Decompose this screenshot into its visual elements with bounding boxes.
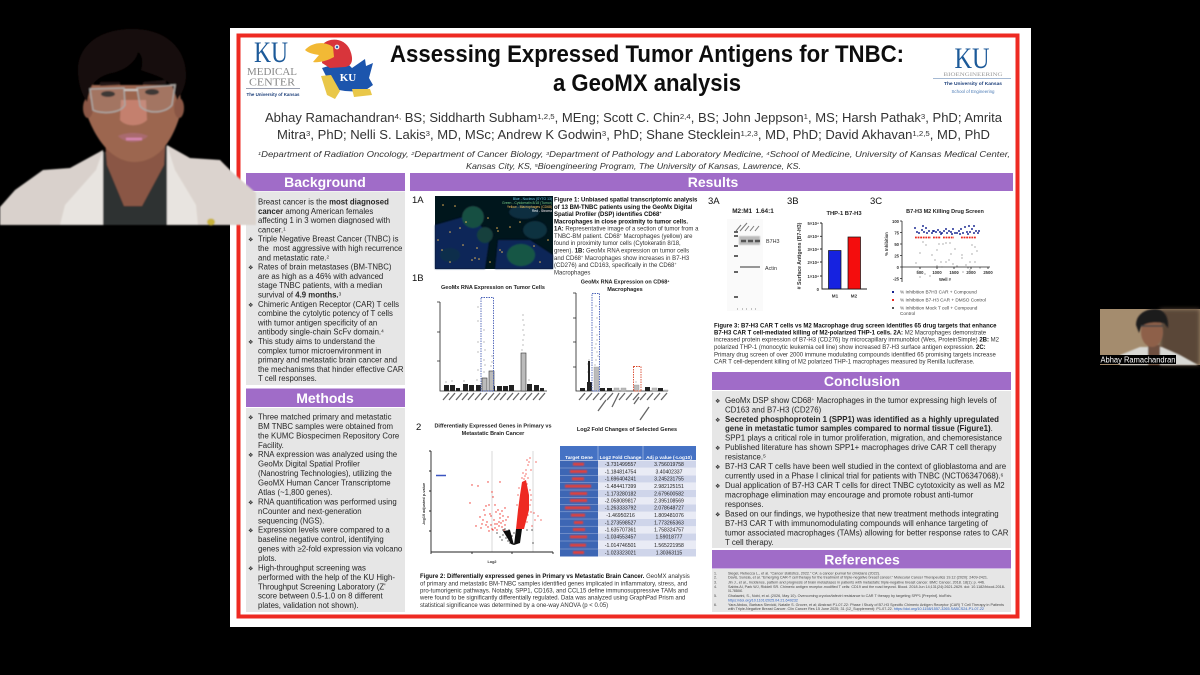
caption: figure 2 [419, 574, 690, 609]
text: conclusion bullets: ❖ [715, 464, 720, 471]
logo: KU Medical Center: The University of Kansas [246, 92, 300, 97]
text: conclusion bullets: ❖ [715, 483, 720, 490]
caption: figure 2: of primary and metastatic BM-TNBC samples identified genes implicated in inflammatory, stress, and [420, 581, 687, 587]
text: reference list: Yara Abdou, Barbara Sievicki, Natalie S. Grover, et al; Abstract P1-07-22: Phase I Study of B7-H3 Specific Chimeric Antigen Receptor (CAR) T Cell Therapy in Patients [728, 603, 1004, 607]
text: methods bullets: nCounter and next-generation [258, 507, 362, 516]
logo: KU Medical Center: KU [254, 36, 288, 69]
text: reference list: Jin J., et al., Incidence, pattern and prognosis of brain metastases in patients with metastatic triple-negative breast cancer. BMC Cancer, 2018. 18(1): p. 446. [728, 580, 985, 584]
panel: methods [246, 388, 405, 612]
affiliations [258, 149, 1010, 171]
logo: KU Medical Center: MEDICAL [247, 66, 297, 78]
heading: references: References [824, 552, 900, 568]
text: methods bullets: the KUMC Biospecimen Repository Core [258, 431, 399, 440]
text: conclusion bullets: T cell therapy. [725, 538, 774, 547]
text: methods bullets: ❖ [248, 528, 253, 535]
text: methods bullets: Atlas (~1,800 genes). [258, 488, 332, 497]
text: background bullets: ❖ [248, 339, 253, 346]
figure label 1B: 1B [412, 273, 424, 284]
caption: figure 1: Figure 1: Unbiased spatial transcriptomic analysis [554, 198, 698, 204]
table: log2 fold changes: 2.982125151 [654, 484, 684, 490]
text: reference list: https://doi.org/10.1101/2025.04.21.649232 [728, 598, 798, 602]
text: reference list [714, 572, 1006, 611]
chart: immunoblot: B7H3 [766, 239, 780, 245]
text: background bullets: antibody single-chain ScFv domain.4 [258, 328, 384, 337]
legend: % Inhibition Mock T cell + Compound [900, 306, 978, 310]
chart: volcano plot: Log2 [487, 560, 497, 564]
caption: figure 1: Macrophages in close proximity to tumor cells. [554, 219, 688, 225]
caption: figure 3: Figure 3: B7-H3 CAR T cells vs M2 Macrophage drug screen identifies 65 drug targets that enhance [714, 323, 997, 329]
table: log2 fold changes: -1.184814754 [605, 469, 636, 475]
heading: conclusion: Conclusion [824, 373, 900, 389]
table: log2 fold changes: 2.679600582 [654, 491, 684, 497]
text: methods bullets: High-throughput screening was [258, 563, 366, 572]
text: reference list: 2. [714, 576, 717, 580]
chart: THP-1 B7-H3 bars: 0 [817, 287, 820, 292]
text: conclusion bullets: SPP1 plays a critical role in tumor proliferation, migration, and chemoresistance [725, 434, 1003, 443]
chart: THP-1 B7-H3 bars: M1 [832, 294, 839, 298]
text: reference list: Siegel, Rebecca L., et al. "Cancer statistics, 2022." CA: a cancer journal for clinicians (2022). [728, 572, 880, 576]
text: methods bullets: baseline negative control, identifying [258, 535, 384, 544]
panel: background [246, 173, 405, 385]
chart: volcano plot: Metastatic Brain Cancer [462, 431, 525, 437]
authors: Mitra3, PhD; Nelli S. Lakis 3, MD, MSc; Andrew K Godwin 3, PhD; Shane Stecklein 1,2,3, MD, PhD; David Akhavan 1,2,5, MD, PhD [277, 128, 990, 142]
text: conclusion bullets: resistance.5 [725, 453, 766, 462]
text: conclusion bullets [715, 396, 1009, 547]
table: log2 fold changes: 3.245231755 [654, 477, 684, 483]
text: conclusion bullets: gene in metastatic tumor samples compared to normal tissue (Figure1). [725, 424, 993, 433]
text: methods bullets: sequencing (NGS). [258, 516, 324, 525]
image: fluorescence micrograph: Blue - Nucleus (SYTO 13) [513, 197, 552, 201]
chart: THP-1 B7-H3 bars: 5×10⁴ [807, 221, 819, 226]
logo: KU Medical Center: CENTER [249, 76, 296, 88]
text: background bullets: Chimeric Antigen Receptor (CAR) T cells [258, 300, 399, 309]
chart: expression on tumor cells: GeoMx RNA Expression on Tumor Cells [441, 285, 545, 291]
text: conclusion bullets: ❖ [715, 445, 720, 452]
table: log2 fold changes: -1.023323021 [605, 550, 636, 556]
chart: THP-1 B7-H3 bars: 1×10⁴ [807, 274, 819, 279]
logo: KU Bioengineering: School of Engineering [952, 89, 995, 94]
legend [892, 290, 986, 316]
text: reference list: 5. [714, 594, 717, 598]
figure label 3C: 3C [870, 196, 882, 207]
presenter video: thumbnail [1100, 309, 1200, 365]
chart: volcano plot: -log10 adjusted p-value [422, 483, 426, 525]
text: methods bullets: plates, validation not shown). [258, 601, 359, 610]
caption: figure 2: Figure 2: Differentially expressed genes in Primary vs Metastatic Brain Cancer. GeoMX analysis [420, 574, 690, 580]
figure label 1A: 1A [412, 195, 424, 206]
caption: figure 3: polarized THP-1 (monocytic leukemia cell line) show increased B7-H3 surface antigen expression. 2C: [714, 345, 986, 351]
legend: % Inhibition B7-H3 CAR + DMSO Control [900, 298, 986, 302]
table: log2 fold changes: -2.058089817 [605, 498, 636, 504]
table: log2 fold changes: 3.40402337 [656, 469, 683, 475]
chart: THP-1 B7-H3 bars: 2×10⁴ [807, 260, 819, 265]
text: methods bullets: Throughput Screening Laboratory (Z' [258, 582, 386, 591]
text: reference list: 6. [714, 603, 717, 607]
title [390, 41, 904, 97]
table: log2 fold changes: 1.565221958 [654, 543, 684, 549]
chart: drug screen scatter: B7-H3 M2 Killing Drug Screen [906, 209, 984, 215]
text: background bullets: cancer among American females [258, 207, 373, 216]
chart: volcano plot [422, 424, 553, 564]
authors: Abhay Ramachandran 4, BS; Siddharth Subham 1,2,5, MEng; Scott C. Chin 2,4, BS; John Jeppson 1, MS; Harsh Pathak 3, PhD; Amrita [265, 111, 1002, 125]
caption: figure 1: green). 1B: GeoMx RNA expression on tumor cells [554, 248, 689, 254]
chart: drug screen scatter: 2500 [983, 270, 993, 275]
table: log2 fold changes: -1.696404241 [605, 477, 636, 483]
logo: KU Medical Center [246, 36, 300, 97]
chart: THP-1 B7-H3 bars: # Surface Antigens (B7-H3) [797, 222, 803, 289]
text: methods bullets: GeoMX Human Cancer Transcriptome [258, 478, 391, 488]
text: background bullets: are as high as a 46% with advanced [258, 272, 383, 281]
text: methods bullets: Expression levels were compared to a [258, 526, 390, 535]
text: reference list: Sabbs Al, Park WJ, Riddell SR. Chimeric antigen receptor-modified T cells: CD19 and the road beyond. Blood. 2018 Jun 14;131(24):2621-2629. doi: 10.1182/blood-2018- [728, 585, 1006, 589]
chart: drug screen scatter: 1000 [932, 270, 942, 275]
table: log2 fold changes: 1.59018777 [656, 535, 683, 541]
text: background bullets [248, 198, 404, 383]
text: background bullets: Rates of brain metastases (BM-TNBC) [258, 263, 392, 272]
chart: immunoblot [727, 208, 780, 311]
chart: THP-1 B7-H3 bars: 3×10⁴ [807, 247, 819, 252]
logo: KU Bioengineering: BIOENGINEERING [944, 73, 1003, 78]
caption: figure 1 [554, 198, 699, 276]
text: reference list: Ghalawini, S., Nobi, et al. (2026, May 10). Overcoming cryotox/tafeviri resistance to CAR T therapy by targeting SPP1 [Preprint]. bioRxiv. [728, 594, 952, 598]
table: log2 fold changes: -3.731499557 [605, 462, 636, 468]
text: conclusion bullets: GeoMx DSP show CD68+ Macrophages in the tumor expressing high levels of [725, 396, 997, 405]
table: log2 fold changes: -1.635707361 [605, 527, 636, 533]
text: background bullets: ❖ [248, 302, 253, 309]
text: methods bullets: plots. [258, 554, 277, 563]
text: background bullets: the most aggressive with high recurrence [258, 244, 402, 253]
chart: drug screen scatter: 50 [894, 242, 900, 247]
table: log2 fold changes: Adj p value (-Log10) [646, 455, 692, 461]
text: reference list: 1. [714, 572, 717, 576]
chart: volcano plot: Differentially Expressed Genes in Primary vs [434, 424, 552, 430]
text: conclusion bullets: ❖ [715, 398, 720, 405]
text: conclusion bullets: tumor associated macrophages (TAMs) allowing for better response rates to CAR [725, 528, 1009, 537]
text: background bullets: ❖ [248, 237, 253, 244]
heading: background [246, 173, 405, 191]
table: log2 fold changes: -1.273598527 [605, 520, 636, 526]
text: background bullets: This study aims to understand the [258, 337, 375, 346]
image: fluorescence micrograph: Green - Cytokeratin 8/18 (Tumor) [502, 201, 552, 205]
text: conclusion bullets: Published literature has shown SPP1+ macrophages drive CAR T cell therapy [725, 443, 996, 452]
logo: KU Bioengineering [933, 42, 1011, 94]
chart: expression on CD68+ macrophages: Macrophages [607, 287, 643, 293]
caption: figure 1: found in proximity tumor cells (Cytokeratin 8/18, [554, 241, 681, 247]
affiliations: Kansas City, KS, 5Bioengineering Program, The University of Kansas, Lawrence, KS. [466, 161, 801, 171]
caption: figure 1: and CD68+ Macrophages show increases in B7-H3 [554, 255, 690, 262]
text: methods bullets: genes with ≥2-fold expression via volcano [258, 545, 403, 554]
text: methods bullets: RNA expression was analyzed using the [258, 450, 397, 459]
label: presenter name: Abhay Ramachandran [1100, 356, 1176, 364]
chart: THP-1 B7-H3 bars: M2 [851, 294, 858, 298]
heading: results [410, 173, 1013, 191]
chart: THP-1 B7-H3 bars: THP-1 B7-H3 [826, 211, 862, 217]
text: background bullets: primary and metastatic brain cancer and [258, 356, 397, 365]
heading: methods [246, 388, 405, 407]
text: methods bullets: RNA quantification was performed using [258, 497, 397, 506]
heading: conclusion [712, 372, 1011, 390]
text: conclusion bullets: Dual application of B7-H3 CAR T cells for direct TNBC cytotoxicity as well as M2 [725, 481, 1005, 490]
heading: background: Background [284, 174, 366, 190]
table: log2 fold changes: 3.756019758 [654, 462, 684, 468]
table: log2 fold changes: Target Gene [565, 455, 593, 461]
text: methods bullets: BM TNBC samples were obtained from [258, 422, 393, 431]
caption: figure 1: TNBC-BM patient. CD68+ Macrophages (yellow) are [554, 233, 693, 240]
figure label 2: 2 [416, 422, 421, 433]
text: conclusion bullets: CD163 and B7-H3 (CD276) [725, 405, 822, 414]
text: methods bullets: Three matched primary and metastatic [258, 412, 392, 422]
logo: KU Bioengineering: The University of Kansas [944, 81, 1002, 86]
chart: drug screen scatter: 500 [916, 270, 924, 275]
caption: figure 2: statistical significance was determined by a one-way ANOVA (p < 0.05) [420, 603, 608, 609]
text: methods bullets: score between 0.5-1.0 on 8 different [258, 592, 384, 601]
chart: expression on CD68+ macrophages: GeoMx RNA Expression on CD68+ [581, 279, 669, 286]
panel: conclusion [712, 372, 1011, 548]
chart: drug screen scatter [884, 209, 993, 316]
image: fluorescence micrograph: Yellow - Macrophages (CD68) [507, 205, 552, 209]
chart: expression on CD68+ macrophages [573, 279, 669, 420]
text: background bullets: ❖ [248, 265, 253, 272]
caption: figure 2: were found to be significantly differentially regulated. Data was analyzed using GraphPad Prism and [419, 596, 685, 602]
poster [230, 28, 1031, 627]
figure label 3A: 3A [708, 196, 720, 207]
text: reference list: with Triple-Negative Breast Cancer. Clin Cancer Res 15 June 2025; 31 (12_Supplement): P1-07-22. https://doi.org/10.1158/1557-3265.SABCS24-P1-07-22 [728, 607, 984, 611]
chart: drug screen scatter: 0 [897, 265, 900, 270]
table: log2 fold changes: 1.30363115 [656, 550, 682, 556]
table: log2 fold changes: Log2 Fold Changes of Selected Genes [577, 427, 677, 433]
text: conclusion bullets: currently used in a Phase I clinical trial for patients with TNBC (NCT06347068).6 [725, 472, 1004, 481]
legend: % Inhibition B7H3 CAR + Compound [900, 290, 977, 294]
text: background bullets: survival of 4.9 months.3 [258, 290, 342, 300]
image: fluorescence micrograph: Red - Stroma [532, 209, 552, 213]
presenter video: main speaker [0, 29, 256, 225]
chart: immunoblot: M2:M1 1.64:1 [732, 208, 774, 215]
text: reference list: 3. [714, 580, 717, 584]
caption: figure 1: Macrophages [554, 270, 590, 276]
caption: figure 3: CAR T cell-dependent killing of M2 polarized THP-1 macrophages measured by Renilla luciferase. [714, 360, 975, 366]
text: conclusion bullets: B7-H3 CAR T cells have been well studied in the context of glioblastoma and are [725, 462, 1007, 471]
text: conclusion bullets: ❖ [715, 512, 720, 518]
caption: figure 1: 1A: Representative image of a section of tumor from a [554, 227, 699, 233]
caption: figure 1: Spatial Profiler (DSP) identifies CD68+ [554, 211, 661, 218]
text: reference list: 4. [714, 585, 717, 589]
text: conclusion bullets: macrophage elimination may encourage and promote robust anti-tumor [725, 490, 974, 500]
table: log2 fold changes: -1.263333792 [605, 506, 636, 512]
panel: references [712, 550, 1011, 612]
table: log2 fold changes: -1.173280182 [605, 491, 636, 497]
caption: figure 3: increased protein expression of B7-H3 (CD276) by microcapillary immunoblot (Wes, ProteinSimple) 2B: M2 [714, 338, 1000, 344]
figure label 3B: 3B [787, 196, 799, 207]
authors [265, 111, 1002, 142]
text: reference list: Davis, Sunsia, et al. "Emerging CAR-T cell therapy for the treatment of triple-negative breast cancer." Molecular Cancer Therapeutics 19.12 (2020): 2409-2421. [728, 576, 988, 580]
caption: figure 3 [714, 323, 1000, 366]
text: background bullets: Triple Negative Breast Cancer (TNBC) is [258, 235, 399, 244]
text: conclusion bullets: Based on our findings, we hypothesize that new treatment methods integrating [725, 510, 999, 518]
chart: immunoblot: Actin [765, 266, 777, 272]
logo: Jayhawk mascot [305, 40, 373, 99]
chart: THP-1 B7-H3 bars: 4×10⁴ [807, 234, 819, 239]
text: background bullets: complex tumor microenvironment in [258, 346, 382, 355]
text: methods bullets: ❖ [248, 499, 253, 506]
text: background bullets: the mechanisms that hinder effective CAR [258, 365, 404, 374]
caption: figure 1: of 13 BM-TNBC patients using the GeoMx Digital [554, 205, 693, 211]
text: methods bullets: performed with the help of the KU High- [258, 573, 395, 582]
table: log2 fold changes: -1.484417399 [605, 484, 636, 490]
logo: KU Bioengineering: KU [954, 42, 990, 75]
title: Assessing Expressed Tumor Antigens for TNBC: [390, 41, 904, 68]
table: log2 fold changes: -1.46950216 [606, 513, 635, 519]
heading: references [712, 550, 1011, 568]
chart: drug screen scatter: % Inhibition [884, 232, 889, 256]
text: methods bullets: ❖ [248, 414, 253, 422]
text: background bullets: and metastatic rate.2 [258, 253, 329, 262]
caption: figure 3: B7-H3 CAR T cell-mediated killing of M2-polarized THP-1 cells. 2A: M2 Macrophages demonstrate [714, 331, 987, 337]
affiliations: 1Department of Radiation Oncology, 2Department of Cancer Biology, 3Department of Pathology and Laboratory Medicine, 4School of Medicine, University of Kansas Medical Center, [258, 149, 1010, 159]
table: log2 fold changes: Log2 Fold Change [600, 455, 642, 461]
caption: figure 2: pro-tumorigenic pathways. Notably, SPP1, CD163, and CCL15 define immunosuppressive TAMs and [420, 589, 688, 595]
chart: drug screen scatter: 75 [894, 230, 900, 236]
text: methods bullets: Facility. [258, 441, 284, 450]
text: reference list: 01-785840. [728, 589, 743, 593]
chart: drug screen scatter: 1500 [949, 270, 959, 275]
legend: Control [900, 311, 915, 316]
chart: drug screen scatter: 25 [894, 254, 900, 258]
chart: drug screen scatter: 100 [892, 219, 900, 224]
chart: expression on tumor cells [437, 285, 547, 400]
text: conclusion bullets: Secreted phosphoprotein 1 (SPP1) was identified as a highly upregulated [725, 415, 999, 424]
table: log2 fold changes: 2.395108569 [654, 498, 684, 504]
text: background bullets: cancer.1 [258, 225, 286, 234]
table: log2 fold changes: 1.773265363 [654, 520, 684, 526]
text: conclusion bullets: B7-H3 CAR T with immunomodulating compounds will enhance targeting of [725, 519, 989, 528]
table: log2 fold changes: 1.809481076 [654, 513, 684, 519]
text: methods bullets: ❖ [248, 565, 253, 572]
heading: results: Results [688, 174, 738, 190]
chart: THP-1 B7-H3 bars [797, 211, 867, 298]
chart: drug screen scatter: 2000 [966, 270, 976, 275]
table: log2 fold changes: -1.014746501 [605, 543, 636, 549]
text: methods bullets: GeoMx Digital Spatial Profiler [258, 460, 360, 469]
text: background bullets: with tumor antigen specificity of an [257, 318, 377, 327]
text: background bullets: combine the cytolytic potency of T cells [258, 309, 393, 318]
text: conclusion bullets: responses. [725, 500, 764, 509]
image: fluorescence micrograph [435, 196, 553, 269]
text: methods bullets: ❖ [248, 452, 253, 459]
table: log2 fold changes: -1.034553457 [605, 535, 636, 541]
table: log2 fold changes: 2.078648727 [654, 506, 684, 512]
text: background bullets: affecting 1 in 3 women diagnosed with [258, 216, 390, 225]
text: background bullets: T cell responses. [258, 374, 317, 383]
text: methods bullets: (Nanostring Technologies), utilizing the [258, 469, 392, 478]
heading: methods: Methods [296, 390, 354, 406]
text: methods bullets [248, 412, 403, 610]
text: background bullets: stage TNBC patients, with a median [258, 281, 382, 290]
chart: drug screen scatter: -25 [893, 276, 900, 282]
caption: figure 3: Primary drug screen of over 2000 immune modulating compounds identified 65 promising targets increase [714, 352, 996, 358]
table: log2 fold changes [560, 427, 696, 556]
logo: Jayhawk mascot: KU [340, 72, 356, 84]
chart: drug screen scatter: Well # [939, 277, 952, 282]
caption: figure 1: (CD276) and CD163, specifically in the CD68+ [554, 263, 676, 269]
text: conclusion bullets: ❖ [715, 417, 720, 424]
table: log2 fold changes: 1.758324757 [654, 527, 684, 533]
title: a GeoMX analysis [553, 70, 741, 97]
text: background bullets: Breast cancer is the most diagnosed [258, 198, 389, 206]
